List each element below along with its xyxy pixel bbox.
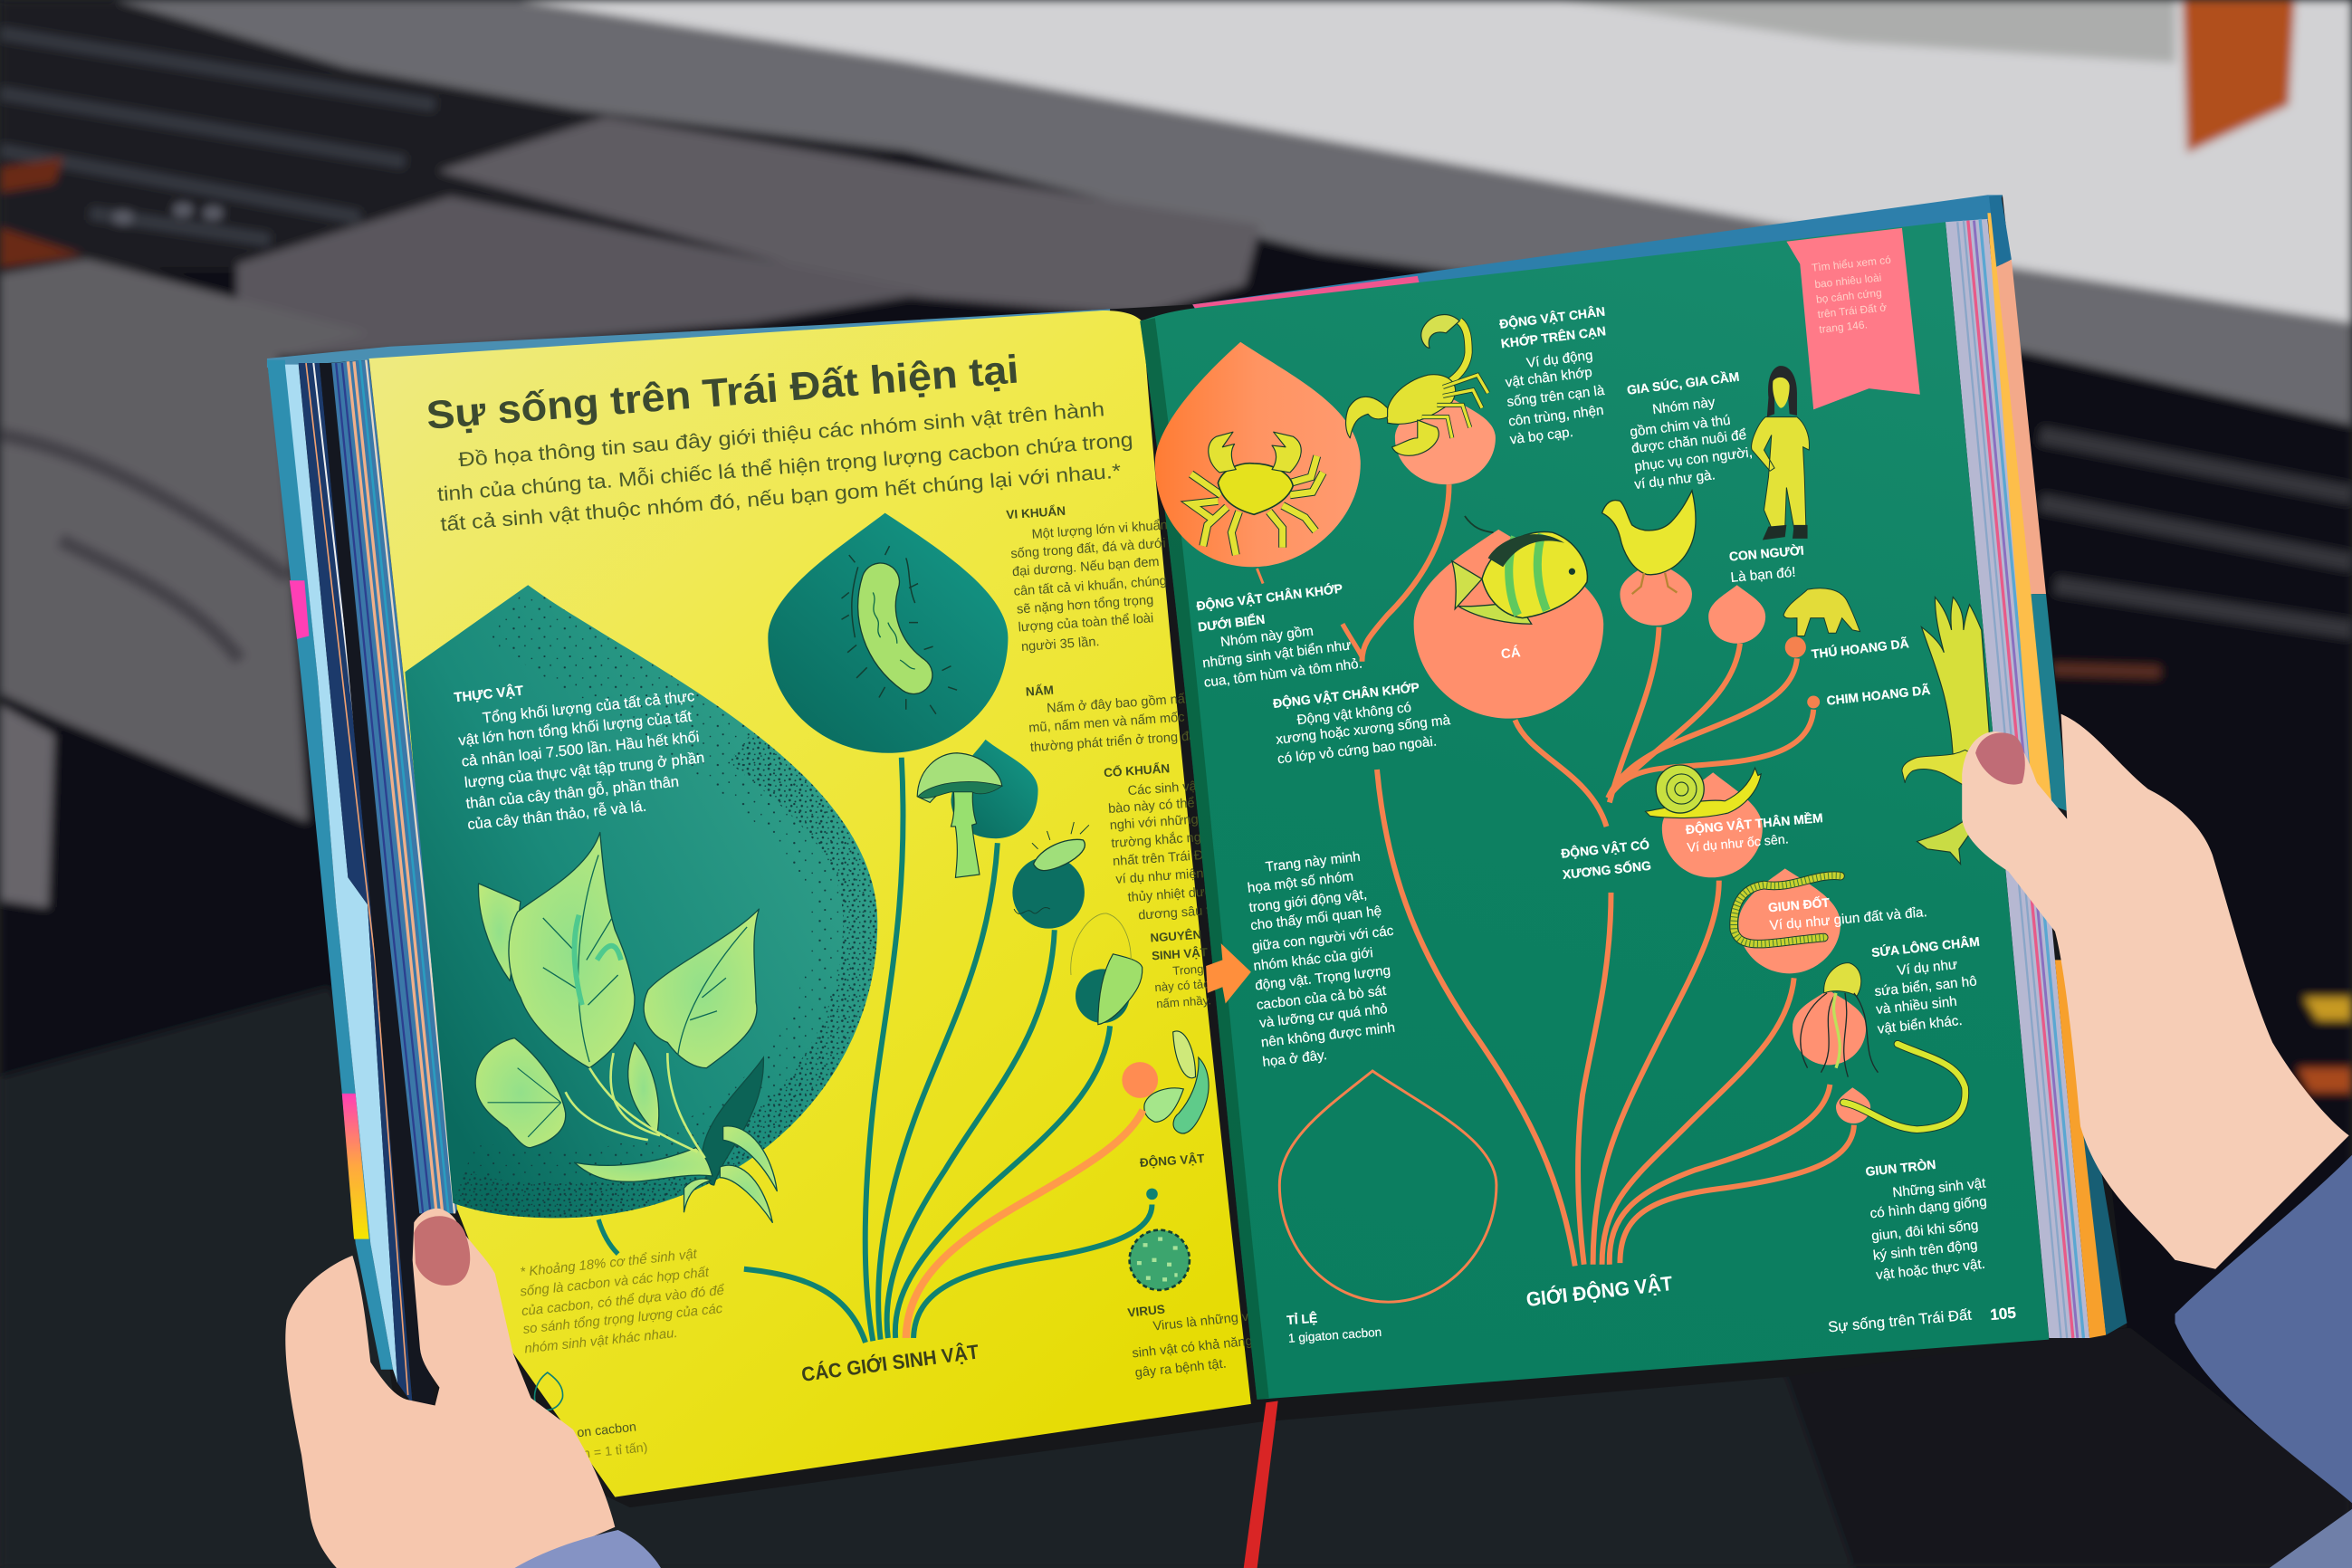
blue cover strip — [2031, 594, 2069, 811]
text: humans — [1728, 542, 1804, 586]
text: roundworms: giun, đôi khi sống — [1870, 1218, 1979, 1244]
right orange strip — [1987, 213, 2052, 804]
text: livestock: gồm chim và thú — [1629, 413, 1731, 440]
text: animal page note: cho thấy mối quan hệ — [1249, 904, 1382, 933]
plant stem stub — [598, 1219, 618, 1254]
text: archaea: thủy nhiệt dưới đáy — [1127, 883, 1242, 905]
panel: protist leaf — [1071, 913, 1143, 1025]
text: cnidarians — [1870, 933, 1980, 1037]
text: arthropods — [1272, 679, 1451, 767]
intro text: Đồ họa thông tin sau đây giới thiệu các nhóm sinh vật trên hành — [457, 397, 1105, 471]
text: roundworms: có hình dạng giống — [1869, 1194, 1987, 1221]
text: bacteria: cân tất cả vi khuẩn, chúng — [1013, 574, 1167, 599]
heading: animal kingdom: GIỚI ĐỘNG VẬT — [1525, 1272, 1674, 1311]
plant leaf text: lượng của thực vật tập trung ở phần — [464, 749, 705, 791]
label: fish: CÁ — [1500, 645, 1522, 662]
label: vertebrates: XƯƠNG SỐNG — [1562, 857, 1652, 882]
text: protists: NGUYÊN — [1150, 928, 1202, 945]
panel: land arthropod leaf — [1346, 315, 1496, 484]
panel: left yellow page — [369, 311, 1251, 1497]
right page stems — [1257, 484, 1854, 1266]
text: protists: nấm nhầy. — [1156, 993, 1211, 1010]
panel: fungi leaf — [917, 740, 1038, 877]
bookmark text: trang 146. — [1819, 318, 1868, 336]
heading: kingdoms: CÁC GIỚI SINH VẬT — [800, 1340, 980, 1386]
text: bacteria: người 35 lần. — [1021, 635, 1100, 655]
text: arthropods: Động vật không có — [1296, 700, 1412, 728]
scale leaf outline — [1279, 1071, 1496, 1302]
right page edges — [1946, 195, 2127, 1338]
text: protists: này có tảo và — [1154, 976, 1227, 994]
page footer — [1827, 1304, 2017, 1335]
icon: eagle — [1902, 597, 1991, 864]
text: animal page note: động vật. Trọng lượng — [1254, 963, 1391, 994]
panel: annelid leaf — [1734, 868, 1840, 973]
text: land arthropods: và bọ cạp. — [1509, 425, 1574, 447]
sleeve cuff bottom — [2268, 1509, 2352, 1568]
plant leaf text: vật lớn hơn tổng khối lượng của tất — [457, 707, 693, 749]
ribbon bookmark — [1244, 1401, 1278, 1568]
panel: bacteria leaf — [768, 513, 1008, 753]
text: fungi: Nấm ở đây bao gồm nấm — [1047, 692, 1197, 716]
pink cover edge — [1192, 276, 1420, 315]
nail — [414, 1216, 470, 1286]
bookmark text: trên Trái Đất ở — [1817, 301, 1888, 320]
text: land arthropods — [1498, 303, 1607, 447]
nail — [1975, 732, 2025, 785]
icon: human — [1752, 366, 1809, 540]
text: footnote: của cacbon, có thể dựa vào đó để — [521, 1284, 725, 1319]
left sleeve — [513, 1530, 662, 1568]
plant leaf text: thân của cây thân gỗ, phần thân — [465, 772, 680, 812]
panel: fish leaf — [1414, 516, 1603, 719]
bookmark text — [1811, 253, 1892, 336]
text: land arthropods: vật chân khớp — [1505, 365, 1593, 390]
panel: human leaf — [1708, 366, 1809, 644]
text: virus — [1127, 1302, 1253, 1381]
scale left: on cacbon — [577, 1420, 637, 1440]
text: protists: Trong số — [1172, 961, 1220, 978]
text: cnidarians: và nhiều sinh — [1875, 994, 1957, 1018]
icon: snail — [1646, 765, 1761, 818]
text: footnote: sống là cacbon và các hợp chất — [520, 1266, 711, 1300]
left hand — [285, 1209, 662, 1568]
text: archaea: dương sâu thẳm. — [1138, 900, 1239, 923]
text: archaea: nghi với những môi — [1109, 811, 1224, 833]
text: footnote: so sánh tổng trọng lượng của các — [522, 1302, 723, 1337]
text: footnote: * Khoảng 18% cơ thể sinh vật — [520, 1247, 698, 1280]
bookmark text: bọ cánh cứng — [1815, 286, 1882, 306]
text: virus: Virus là những vi — [1152, 1309, 1252, 1334]
text: fungi: mũ, nấm men và nấm mốc — [1028, 711, 1185, 736]
panel: livestock leaf — [1602, 491, 1696, 626]
icon: jellyfish — [1801, 963, 1878, 1077]
text: livestock: ví dụ như gà. — [1633, 467, 1716, 492]
text: bacteria: VI KHUẨN — [1006, 504, 1066, 521]
text: animal page note: họa một số nhóm — [1247, 869, 1354, 896]
right cover corner — [1989, 195, 2012, 267]
icon: fish — [1452, 516, 1587, 624]
intro text: tinh của chúng ta. Mỗi chiếc lá thể hiện trọng lượng cacbon chứa trong — [436, 428, 1133, 505]
gutter shadow — [1140, 318, 1269, 1400]
text: archaea: Các sinh vật đơn — [1127, 778, 1228, 798]
text: roundworms: Những sinh vật — [1892, 1175, 1987, 1200]
top left cover edge — [267, 309, 1110, 368]
text: animal page note — [1247, 849, 1396, 1070]
text: cnidarians: vật biển khác. — [1877, 1013, 1963, 1037]
text: virus: gây ra bệnh tật. — [1134, 1357, 1227, 1381]
text: land arthropods: ĐỘNG VẬT CHÂN — [1498, 303, 1606, 331]
text: bacteria: đại dương. Nếu bạn đem — [1012, 555, 1160, 579]
left page edges — [267, 360, 457, 1404]
text: marine arthropods: những sinh vật biển như — [1201, 637, 1352, 671]
plant leaf text — [454, 682, 705, 833]
text: marine arthropods: cua, tôm hùm và tôm nhỏ. — [1203, 655, 1363, 691]
text: animal page note: và lưỡng cư quá nhỏ — [1258, 1001, 1389, 1031]
text: roundworms: vật hoặc thực vật. — [1875, 1257, 1986, 1283]
text: bacteria: Một lượng lớn vi khuẩn — [1031, 518, 1168, 542]
scale left — [535, 1372, 648, 1461]
bookmark text: bao nhiêu loài — [1814, 271, 1882, 291]
text: livestock — [1626, 368, 1754, 492]
text: virus: VIRUS — [1127, 1302, 1166, 1320]
scale right — [1286, 1310, 1382, 1345]
icon: mushroom — [917, 753, 1002, 877]
panel: right green page — [1140, 222, 2049, 1400]
text: bacteria: sẽ nặng hơn tổng trọng — [1017, 593, 1154, 617]
panel: marine arthropod leaf — [1155, 342, 1361, 567]
panel: cnidarian leaf — [1793, 963, 1878, 1077]
text: arthropods: ĐỘNG VẬT CHÂN KHỚP — [1272, 679, 1420, 711]
icon: virus — [1130, 1230, 1190, 1290]
icon: chicken — [1602, 491, 1696, 594]
text: livestock: GIA SÚC, GIA CẦM — [1626, 368, 1740, 397]
pink spine tab — [290, 580, 309, 639]
text: archaea: ví dụ như miệng phun — [1115, 864, 1245, 887]
text: cnidarians: SỨA LÔNG CHÂM — [1870, 933, 1980, 960]
intro text: tất cả sinh vật thuộc nhóm đó, nếu bạn gom hết chúng lại với nhau.* — [440, 459, 1122, 536]
icon: archaeon — [1014, 822, 1089, 913]
text: land arthropods: sống trên cạn là — [1506, 383, 1606, 410]
text: livestock: Nhóm này — [1651, 395, 1716, 417]
text: cnidarians: Ví dụ như — [1897, 957, 1958, 979]
icon: roundworm — [1843, 1044, 1965, 1130]
text: archaea: nhất trên Trái Đất, — [1113, 847, 1219, 869]
text: molluscs: ĐỘNG VẬT THÂN MỀM — [1685, 809, 1823, 837]
scale left: n = 1 tỉ tấn) — [582, 1440, 648, 1461]
book block — [267, 195, 2127, 1507]
text: roundworms: GIUN TRÒN — [1865, 1156, 1936, 1179]
text: land arthropods: côn trùng, nhện — [1507, 403, 1604, 430]
text: animal page note: nên không được minh — [1260, 1020, 1396, 1050]
text: cnidarians: sứa biển, san hô — [1874, 973, 1977, 999]
icon: worm — [1734, 875, 1840, 944]
text: molluscs: Ví dụ như ốc sên. — [1687, 832, 1789, 856]
icon: butterfly — [1144, 1031, 1209, 1133]
text: virus: sinh vật có khả năng — [1132, 1334, 1253, 1361]
right sleeve — [2175, 1155, 2352, 1503]
icon: bear — [1783, 588, 1860, 636]
right hand — [1962, 714, 2352, 1568]
salmon tab strip — [1996, 260, 2046, 594]
text: archaea — [1104, 761, 1245, 923]
text: bacteria: sống trong đất, đá và dưới — [1010, 536, 1166, 561]
bookmark — [1786, 228, 1920, 409]
panel: archaea leaf — [1012, 822, 1089, 929]
text: protists — [1150, 928, 1227, 1010]
label: vertebrates: ĐỘNG VẬT CÓ — [1560, 837, 1650, 861]
text: molluscs — [1685, 809, 1823, 856]
text: animal page note: họa ở đây. — [1262, 1047, 1328, 1070]
panel: animal leaf small — [1122, 1031, 1209, 1133]
text: arthropods: có lớp vỏ cứng bao ngoài. — [1276, 733, 1438, 767]
text: marine arthropods: Nhóm này gồm — [1219, 624, 1315, 650]
text: humans: Là bạn đó! — [1730, 565, 1796, 586]
text: animal page note: cacbon của cả bò sát — [1256, 983, 1388, 1013]
text: fungi: thường phát triển ở trong đất. — [1029, 729, 1204, 755]
icon: bacterium — [842, 546, 957, 714]
bookmark text: Tìm hiểu xem có — [1811, 253, 1892, 274]
plant leaf text: cả nhân loại 7.500 lần. Hầu hết khối — [461, 728, 700, 770]
text: fungi: NẤM — [1025, 684, 1054, 699]
arrow — [1206, 943, 1251, 1003]
text: animal page note: Trang này minh — [1265, 849, 1361, 875]
text: fungi — [1025, 684, 1204, 755]
scale right: 1 gigaton cacbon — [1287, 1325, 1382, 1345]
text: animal page note: trong giới động vật, — [1248, 887, 1368, 915]
text: land arthropods: Ví dụ động — [1525, 348, 1593, 371]
icon: plant leaves — [475, 833, 777, 1222]
text: animal page note: nhóm khác của giới — [1253, 945, 1374, 974]
label: wild mammals: THÚ HOANG DÃ — [1811, 635, 1909, 661]
text: bacteria — [1006, 504, 1168, 655]
text: footnote — [520, 1247, 725, 1356]
plant leaf text: của cây thân thảo, rễ và lá. — [466, 798, 647, 833]
text: livestock: được chăn nuôi để — [1630, 427, 1747, 456]
panel: plant leaf — [405, 585, 877, 1254]
page footer: Sự sống trên Trái Đất — [1827, 1305, 1973, 1335]
left page body text — [520, 504, 1253, 1461]
text: animals label: ĐỘNG VẬT — [1139, 1152, 1206, 1170]
lower orange strip — [2055, 960, 2106, 1338]
text: annelids: GIUN ĐỐT — [1767, 894, 1831, 914]
lower cover strip — [2067, 990, 2127, 1335]
plant leaf text: Tổng khối lượng của tất cả thực — [482, 687, 695, 727]
page footer: 105 — [1989, 1304, 2017, 1324]
panel: nematode leaf — [1836, 1044, 1965, 1130]
scale right: TỈ LỆ — [1286, 1310, 1318, 1327]
text: arthropods: xương hoặc xương sống mà — [1276, 712, 1451, 748]
left page stems — [744, 758, 1158, 1343]
panel: mollusc leaf — [1646, 765, 1763, 877]
text: bacteria: lượng của toàn thể loài — [1018, 611, 1154, 636]
text: archaea: bào này có thể tồn — [1108, 795, 1217, 817]
label: wild birds: CHIM HOANG DÃ — [1826, 682, 1931, 708]
text: marine arthropods: ĐỘNG VẬT CHÂN KHỚP — [1195, 580, 1343, 613]
top cover edge — [1192, 195, 2003, 318]
text: footnote: nhóm sinh vật khác nhau. — [524, 1326, 678, 1356]
icon: crab — [1191, 432, 1323, 555]
label: vertebrates — [1560, 837, 1652, 882]
icon: protist — [1071, 913, 1143, 1025]
plant leaf text: THỰC VẬT — [454, 682, 524, 705]
text: marine arthropods: DƯỚI BIỂN — [1197, 611, 1266, 635]
right page text — [1195, 303, 2017, 1345]
text: roundworms — [1865, 1156, 1987, 1283]
colour spine tab — [342, 1094, 369, 1239]
title: Sự sống trên Trái Đất hiện tại — [425, 348, 1020, 438]
text: land arthropods: KHỚP TRÊN CẠN — [1500, 322, 1607, 350]
text: animal page note: giữa con người với các — [1251, 923, 1395, 954]
text: protists: SINH VẬT — [1152, 945, 1208, 962]
icon: scorpion — [1346, 315, 1488, 455]
intro text — [436, 397, 1133, 536]
text: archaea: CỔ KHUẨN — [1104, 761, 1171, 779]
text: marine arthropods — [1195, 580, 1363, 691]
text: archaea: trường khắc nghiệt — [1111, 828, 1223, 851]
text: livestock: phục vụ con người, — [1633, 445, 1754, 474]
text: roundworms: ký sinh trên động — [1872, 1238, 1978, 1264]
text: annelids: Ví dụ như giun đất và đỉa. — [1769, 904, 1927, 933]
text: humans: CON NGƯỜI — [1728, 542, 1804, 564]
open book — [267, 195, 2127, 1507]
